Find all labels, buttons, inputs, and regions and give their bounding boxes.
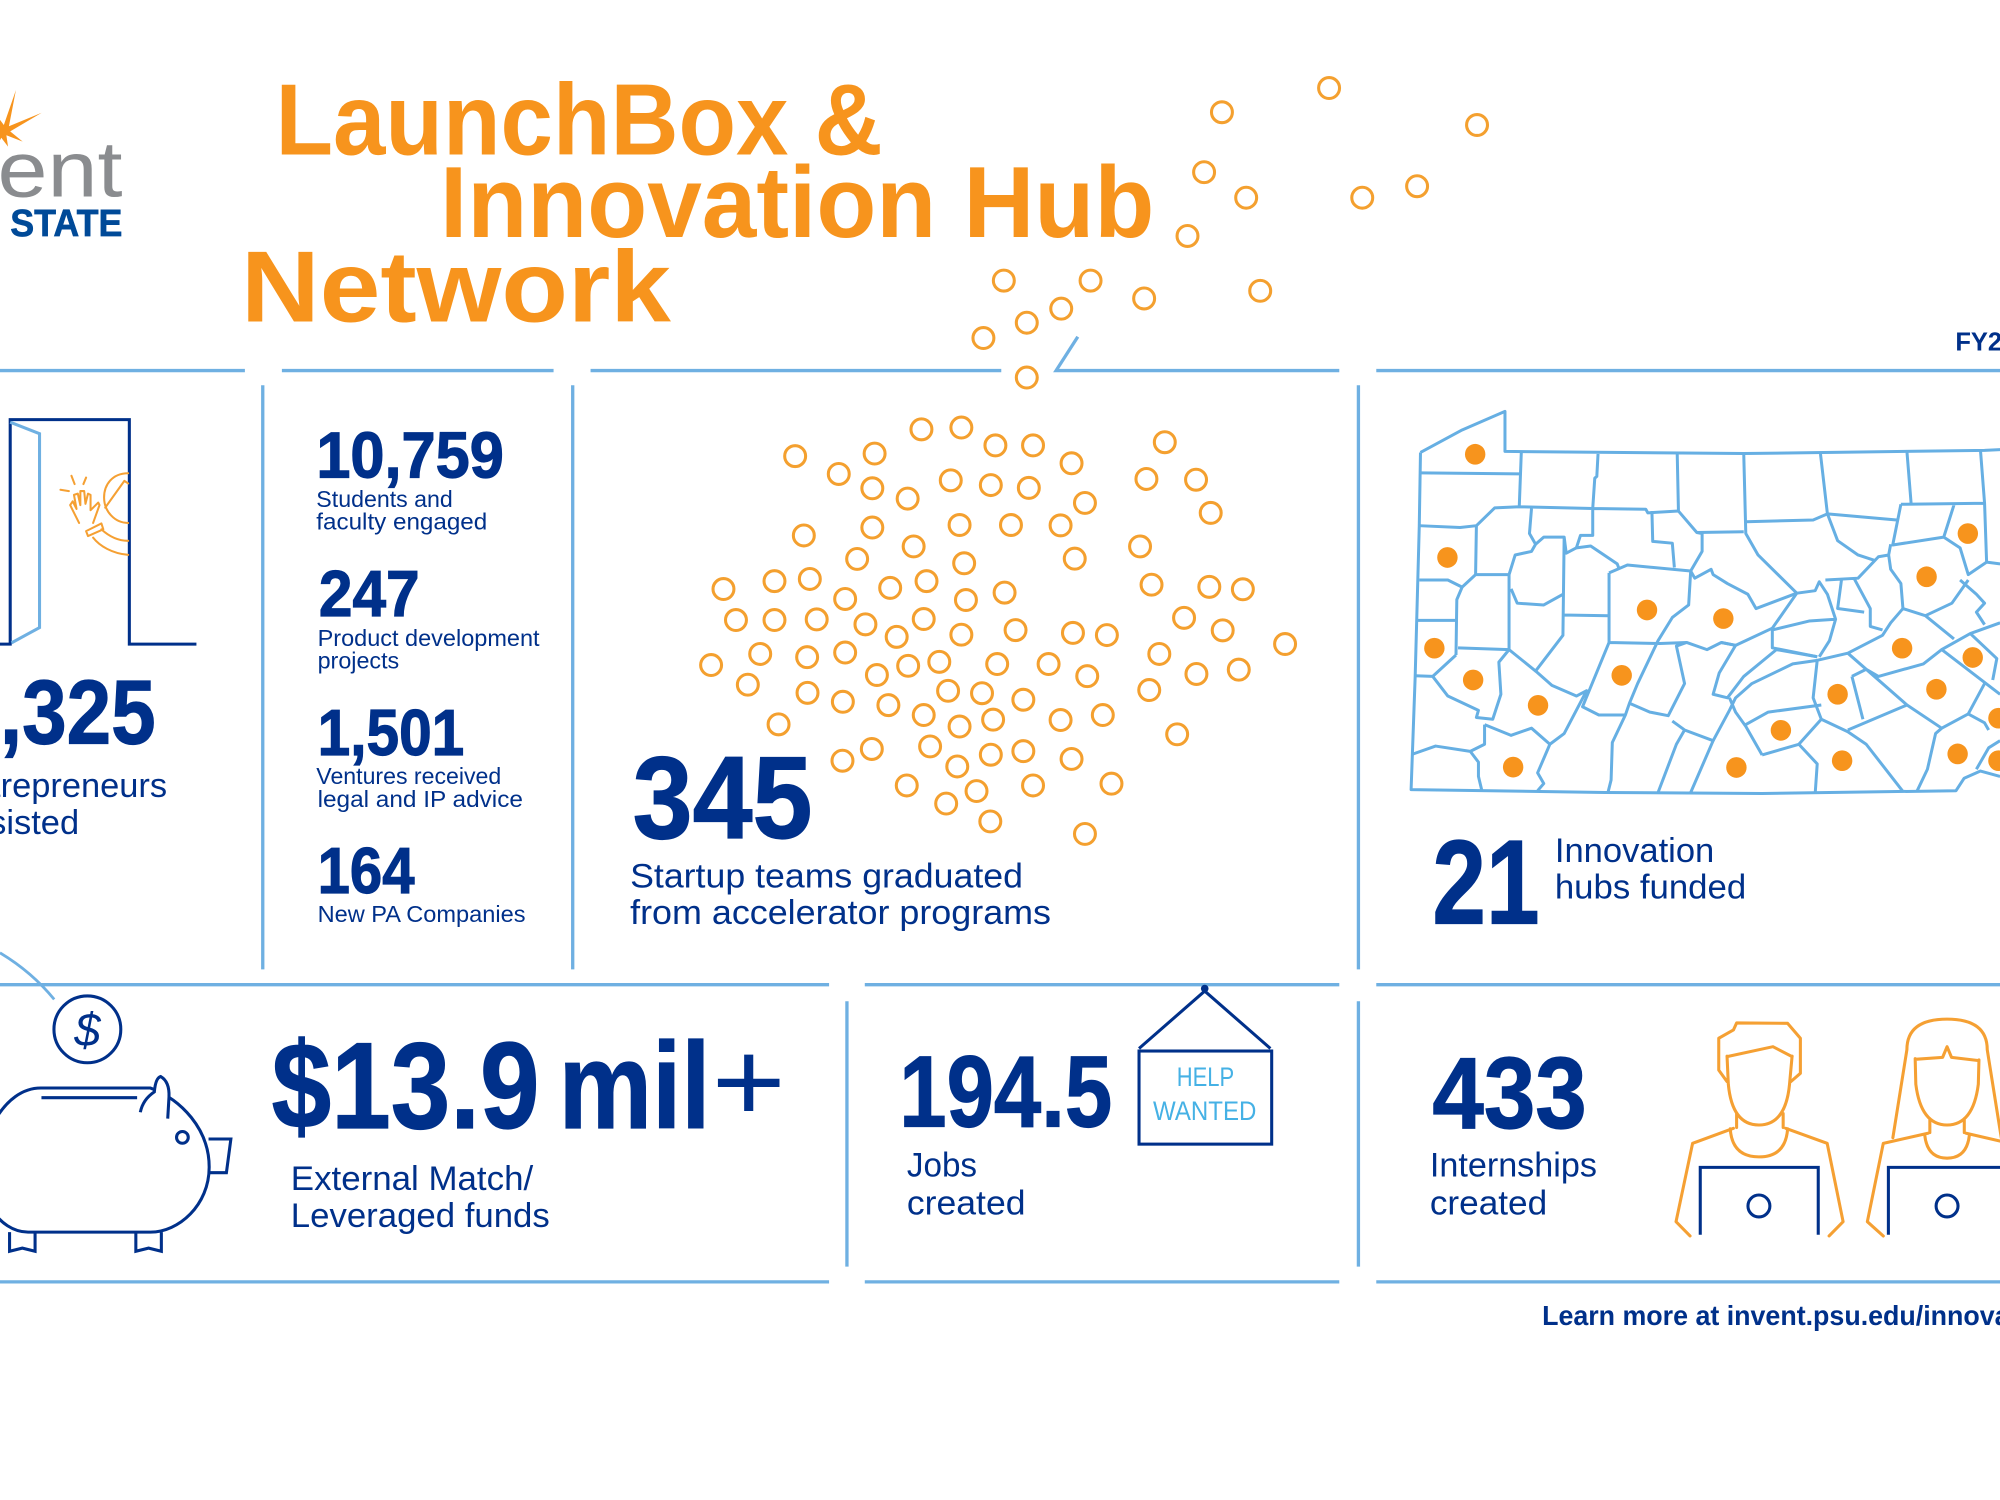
- title: [241, 64, 1154, 343]
- panel: engagement stats: [316, 419, 540, 927]
- stat: new companies: [318, 834, 526, 927]
- label: external match: [291, 1160, 550, 1235]
- stat: ventures advised: 1,501: [318, 696, 464, 769]
- stat: new companies: New PA Companies: [318, 901, 526, 927]
- stat: product development: projects: [318, 647, 399, 673]
- icon: open door with waving person: [0, 420, 196, 644]
- icons: bubbles rising above the panel: [973, 78, 1488, 388]
- label: innovation hubs funded: Innovation: [1555, 832, 1714, 870]
- panel: external funds: [0, 953, 786, 1251]
- label: jobs created: [907, 1147, 1026, 1222]
- label: internships created: [1430, 1147, 1597, 1222]
- icon: help wanted sign: [1139, 985, 1272, 1144]
- panel: startup teams: [630, 417, 1296, 932]
- icon: help wanted sign: HELP: [1177, 1062, 1234, 1092]
- label: innovation hubs funded: hubs funded: [1555, 869, 1746, 907]
- stat: product development: Product development: [318, 625, 540, 651]
- stat: ventures advised: Ventures received: [316, 763, 501, 789]
- label: startup teams graduated: from accelerator programs: [630, 894, 1051, 932]
- label: startup teams graduated: Startup teams graduated: [630, 858, 1023, 896]
- stat: $13.9 mil+: +: [712, 1018, 786, 1146]
- icon: help wanted sign: WANTED: [1153, 1096, 1256, 1126]
- label: jobs created: created: [907, 1184, 1026, 1222]
- stat: ventures advised: legal and IP advice: [318, 786, 523, 812]
- label: entrepreneurs assisted: [0, 767, 167, 842]
- label: innovation hubs funded: [1555, 832, 1746, 907]
- title: LaunchBox &: [276, 64, 883, 176]
- logo: Invent Penn State: [0, 90, 122, 245]
- stat: $13.9 mil+: $13.9: [272, 1017, 540, 1154]
- stat: $13.9 mil+: [272, 1017, 786, 1154]
- logo: Invent Penn State: ent: [0, 124, 122, 213]
- label: startup teams graduated: [630, 858, 1051, 932]
- label: internships created: Internships: [1430, 1147, 1597, 1185]
- icon: male intern at laptop: [1676, 1023, 1843, 1236]
- stat: ventures advised: [316, 696, 523, 812]
- icon: piggy bank with coin: [0, 953, 231, 1251]
- chart: bubble cluster: [701, 417, 1296, 844]
- label: internships created: created: [1430, 1184, 1547, 1222]
- icon: female intern at laptop: [1867, 1019, 2000, 1236]
- panel: internships created: [1430, 1019, 2000, 1236]
- stat: $13.9 mil+: mil: [559, 1017, 710, 1154]
- logo: Invent Penn State: STATE: [10, 202, 122, 245]
- panel: entrepreneurs assisted: [0, 420, 196, 842]
- stat: product development: [318, 557, 540, 673]
- title: Network: [241, 231, 672, 343]
- label: external match: External Match/: [291, 1160, 534, 1198]
- map: Pennsylvania counties with hub dots: [1411, 411, 2000, 794]
- icon: piggy bank with coin: $: [73, 1004, 101, 1057]
- stat: students and faculty: Students and: [316, 486, 453, 512]
- label: external match: Leveraged funds: [291, 1197, 550, 1235]
- stat: 194.5: 194.5: [899, 1036, 1112, 1148]
- label: jobs created: Jobs: [907, 1147, 977, 1185]
- stat: students and faculty: 10,759: [316, 419, 504, 492]
- panel: innovation hubs: [1411, 411, 2000, 949]
- stat: new companies: 164: [318, 834, 415, 907]
- stat: 21: 21: [1432, 815, 1540, 949]
- stat: 433: 433: [1432, 1038, 1587, 1150]
- panel: jobs created: [899, 985, 1272, 1222]
- stat: students and faculty: [316, 419, 504, 534]
- stat: product development: 247: [319, 557, 420, 630]
- stat: students and faculty: faculty engaged: [316, 508, 487, 534]
- title: Innovation Hub: [440, 147, 1154, 259]
- stat: 345: 345: [633, 732, 812, 863]
